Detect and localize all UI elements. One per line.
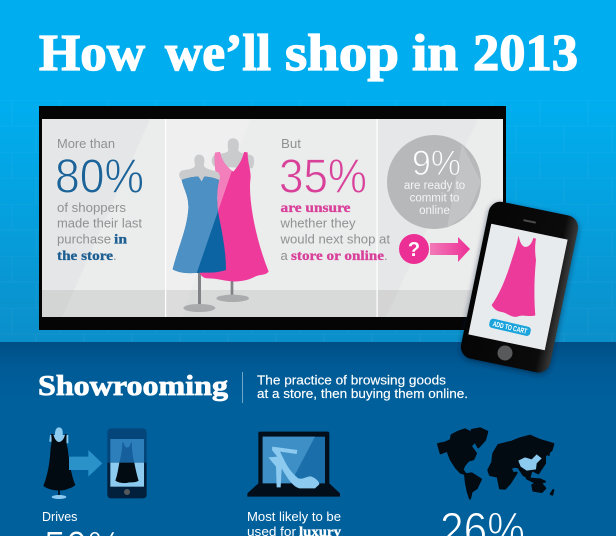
laptop base (247, 483, 340, 497)
text block: 35 percent unsure: are unsure (280, 200, 351, 215)
text block: 80 percent in store: in (114, 232, 128, 246)
text block: 35 percent unsure: But (281, 136, 301, 151)
phone body upper (107, 428, 147, 463)
icon: dress to phone (43, 427, 147, 499)
title: in (412, 25, 458, 82)
title: How (39, 25, 145, 82)
pink dress (200, 152, 269, 281)
text block: 80 percent in store: 80% (55, 150, 144, 204)
arrow: pink towards phone (430, 237, 470, 262)
icon: question mark badge: ? (408, 239, 420, 261)
phone screen (468, 224, 568, 350)
title: 2013 (473, 25, 578, 82)
panel: store display screen (39, 106, 506, 330)
callout: 9 percent ready to commit: are ready to (404, 180, 465, 192)
blue dress glass tint (172, 176, 219, 274)
title: we’ll (165, 25, 271, 82)
phone shadow (459, 202, 580, 377)
text block: drives 50 percent (42, 510, 122, 536)
arrow: dress to phone (69, 450, 102, 477)
dark lower section background (0, 342, 616, 536)
text block: 80 percent in store: the store (57, 248, 113, 263)
text block: 80 percent in store: of shoppers (57, 200, 127, 215)
text block: most likely luxury (247, 510, 341, 536)
text block: showrooming definition: at a store, then buying them online. (257, 387, 468, 401)
text block: most likely luxury: Most likely to be (247, 510, 341, 524)
text block: 35 percent unsure: . (384, 248, 388, 263)
phone button (124, 489, 130, 495)
text block: 35 percent unsure: would next shop at (279, 232, 390, 246)
screen panels (42, 119, 503, 317)
China highlight (518, 454, 542, 471)
callout: 9 percent ready to commit: commit to (410, 192, 459, 204)
text block: 80 percent in store: made their last (57, 216, 142, 230)
text block: 35 percent unsure: whether they (279, 216, 356, 230)
heading: showrooming: Showrooming (38, 370, 229, 402)
laptop screen (263, 437, 325, 484)
sky background wall (0, 0, 616, 342)
text block: 35 percent unsure (279, 136, 390, 263)
phone speaker (523, 219, 536, 224)
text block: 80 percent in store (55, 136, 144, 263)
shoe (268, 447, 319, 488)
text block: 80 percent in store: More than (57, 136, 115, 151)
icon: question mark badge (399, 234, 429, 264)
text block: 35 percent unsure: a (280, 248, 288, 263)
text block: showrooming definition (257, 374, 468, 401)
title (39, 25, 578, 82)
callout: 9 percent ready to commit: 9% (412, 144, 461, 183)
mannequin base (52, 488, 66, 499)
mannequin shoulders (49, 427, 68, 443)
text block: 80 percent in store: purchase (57, 232, 111, 246)
callout: 9 percent ready to commit: online (419, 205, 450, 217)
callout: 9 percent ready to commit (387, 135, 481, 229)
dress on phone screen (119, 443, 134, 463)
title: shop (285, 25, 399, 82)
screen frame (39, 106, 506, 330)
phone with dress (459, 200, 580, 377)
text block: 80 percent in store: . (113, 248, 117, 263)
mannequins with overlapping dresses (173, 138, 269, 312)
phone body (459, 200, 580, 375)
phone screen (110, 439, 144, 463)
add to cart button: ADD TO CART (492, 319, 528, 336)
pink mannequin bust (212, 138, 254, 168)
mannequin stands (183, 272, 249, 312)
icon: laptop with shoe (247, 432, 340, 497)
text block: drives 50 percent: Drives (42, 510, 77, 524)
pink dress glass tint (214, 152, 232, 211)
black dress (43, 434, 75, 490)
text block: 35 percent unsure: store or online (291, 248, 384, 263)
dress on phone (492, 236, 536, 317)
blue dress (173, 177, 226, 273)
phone body lower (107, 463, 147, 498)
laptop lid (258, 432, 329, 487)
text block: showrooming definition: The practice of browsing goods (257, 374, 446, 388)
text block: 35 percent unsure: 35% (279, 150, 367, 204)
phone home button (498, 346, 512, 360)
icon: world map with China highlighted (438, 428, 553, 499)
blue mannequin bust (179, 155, 220, 182)
